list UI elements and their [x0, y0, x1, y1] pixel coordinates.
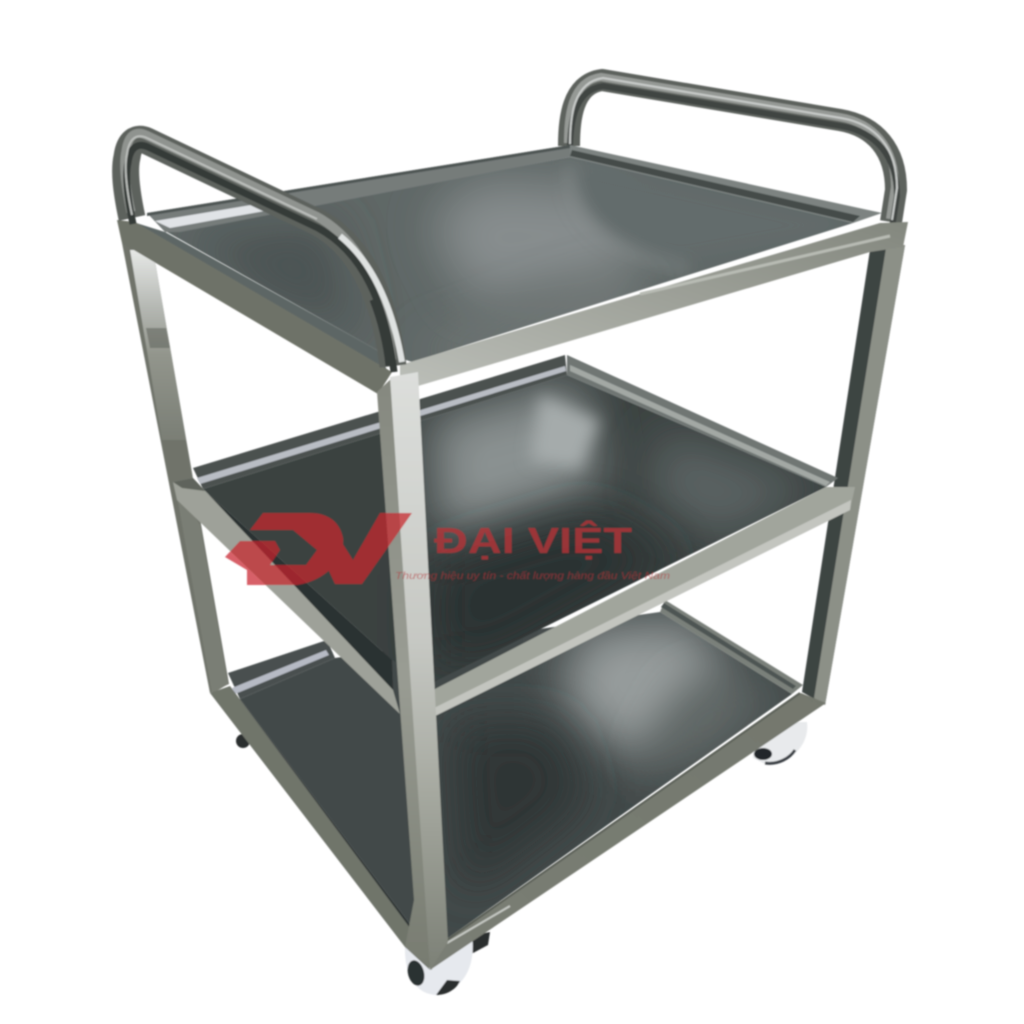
top shelf frame — [117, 220, 908, 394]
front caster — [405, 932, 490, 995]
bottom shelf tray — [228, 600, 803, 938]
rear left leg — [122, 243, 229, 694]
right caster — [753, 722, 807, 764]
middle shelf frame — [173, 478, 855, 716]
bottom shelf frame — [210, 686, 826, 970]
watermark brand name: ĐẠI VIỆT — [434, 519, 632, 561]
top shelf tray — [133, 145, 882, 372]
near handle — [125, 133, 402, 372]
rear right leg — [802, 245, 905, 705]
middle shelf tray — [193, 355, 838, 690]
far handle — [568, 77, 897, 228]
rear left caster — [236, 734, 250, 748]
front leg — [377, 372, 448, 970]
watermark logo: DV — [225, 513, 412, 585]
watermark tagline: Thương hiệu uy tín - chất lượng hàng đầu Việt Nam — [395, 570, 670, 582]
product photo: three tier stainless steel trolley — [111, 68, 909, 996]
